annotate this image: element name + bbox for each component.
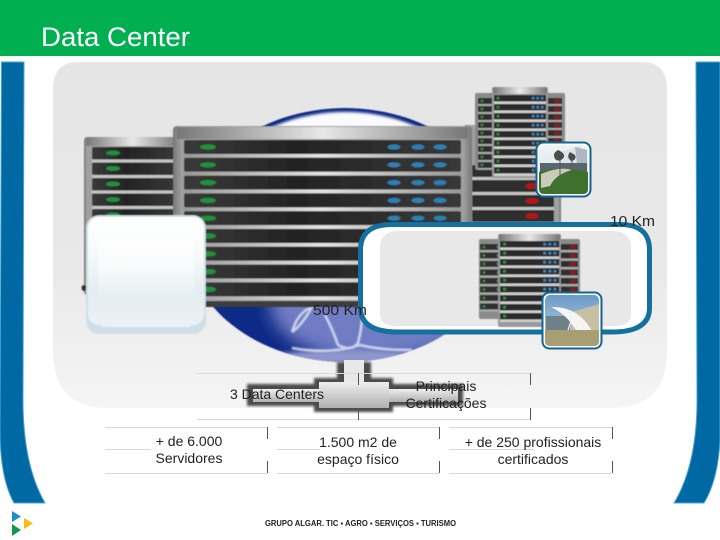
photo: site 1	[536, 142, 590, 196]
small server rack top right	[475, 87, 565, 178]
stand left arm	[253, 389, 319, 402]
label: Principais Certificações: Certificações	[406, 395, 486, 411]
label: 3 Data Centers: 3 Data Centers	[230, 386, 324, 402]
globe wire lines	[292, 307, 412, 351]
stat: physical space	[277, 427, 440, 474]
left blue side bar	[0, 62, 45, 503]
label: 500 Km: 500 Km	[313, 303, 367, 319]
photo: site 2	[542, 292, 602, 348]
stat: physical space: 1.500 m2 de	[319, 434, 397, 450]
icon: logo triangles	[12, 511, 33, 536]
right blue side bar	[674, 62, 720, 503]
stat: certified professionals	[449, 427, 612, 474]
stat: servers: + de 6.000	[156, 433, 222, 449]
white callout box	[86, 215, 206, 334]
globe	[212, 107, 446, 363]
frame: nearby data center	[360, 224, 650, 332]
stat: physical space: espaço físico	[317, 451, 399, 467]
stand right arm	[389, 389, 458, 402]
stat: certified professionals: certificados	[498, 451, 568, 467]
label: Principais Certificações: Principais	[416, 378, 476, 394]
footer text: GRUPO ALGAR. TIC ▪ AGRO ▪ SERVIÇOS ▪ TURISMO	[265, 519, 456, 528]
server rack back left	[82, 137, 179, 295]
frame server rack front	[498, 234, 561, 327]
label: 10 Km: 10 Km	[610, 214, 655, 230]
frame inner panel	[380, 231, 631, 326]
table frame: top row	[197, 373, 530, 420]
server rack main	[173, 126, 472, 307]
stand shadow	[247, 362, 463, 412]
stand base	[319, 382, 389, 408]
title: Data Center	[41, 22, 190, 52]
header bar	[0, 0, 720, 56]
stand neck	[344, 360, 364, 386]
rack front	[492, 87, 548, 178]
frame server rack back	[479, 239, 580, 319]
stat: certified professionals: + de 250 profissionais	[465, 434, 601, 450]
rack back	[475, 93, 565, 170]
background panel	[53, 62, 667, 408]
globe stand	[247, 360, 463, 412]
server rack back right	[465, 125, 561, 225]
stat: servers: Servidores	[156, 450, 222, 466]
stat: servers	[105, 427, 268, 474]
